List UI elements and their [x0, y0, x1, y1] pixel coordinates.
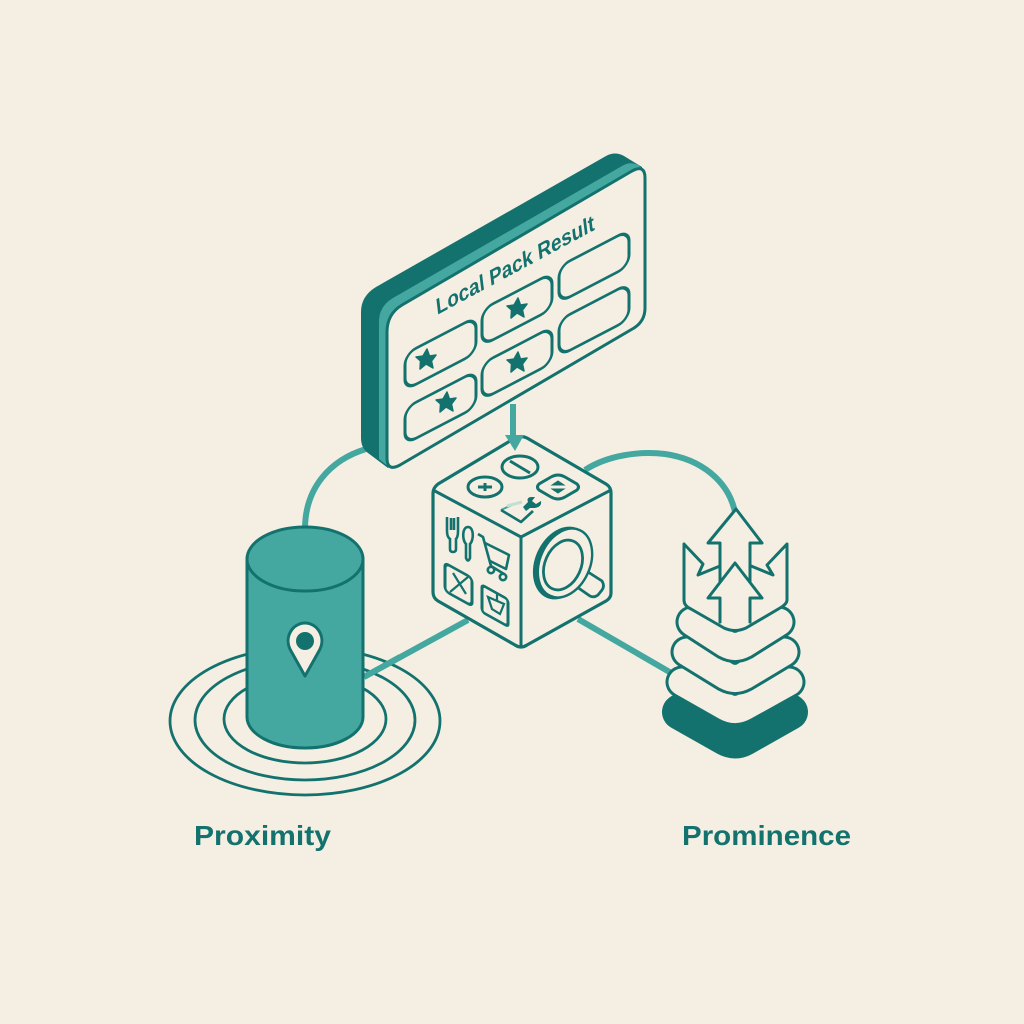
panel back edge	[361, 154, 642, 468]
panel mid edge	[379, 163, 645, 467]
icon: minus ellipse	[502, 456, 538, 478]
connector: cube to prominence stack	[578, 619, 673, 674]
icon: fork	[447, 517, 458, 552]
cube: local ranking factors	[433, 436, 611, 648]
icon: crossed box	[445, 563, 472, 606]
icon: diamond	[538, 475, 578, 499]
cube body	[433, 436, 611, 647]
icon: shopping cart	[478, 534, 509, 580]
dark base chevron	[680, 712, 790, 740]
connector over rings	[364, 657, 400, 677]
icon: wrench	[501, 497, 541, 522]
icon: map pin	[288, 623, 322, 676]
connector: cube to cylinder	[364, 620, 468, 677]
result cards	[405, 230, 629, 444]
panel front face	[387, 169, 645, 467]
arrow group: rising prominence	[684, 509, 787, 630]
main arrow fill	[708, 509, 762, 622]
prominence stack	[680, 509, 790, 740]
connector: cube to prominence arc	[585, 453, 735, 512]
chevron layer 1	[692, 622, 779, 646]
side arrows	[684, 544, 787, 630]
chevron layer 2	[687, 652, 784, 678]
front arrow fill	[708, 563, 762, 622]
label: prominence: Prominence	[682, 820, 851, 851]
label: proximity: Proximity	[194, 820, 331, 851]
panel: local pack result	[361, 154, 645, 468]
icon: magnifier	[522, 517, 604, 609]
cube edges	[433, 490, 611, 648]
magnifier handle	[577, 572, 604, 597]
rating stars	[416, 298, 527, 412]
connector: panel to cylinder	[305, 449, 366, 529]
front arrow outline	[708, 563, 762, 622]
main arrow outline	[708, 509, 762, 622]
chevron layer 3	[682, 682, 789, 710]
proximity rings	[170, 647, 440, 795]
arrow: panel to cube	[505, 404, 524, 451]
icon: spoon	[463, 527, 473, 560]
icon: plus ellipse	[468, 477, 502, 497]
panel heading: Local Pack Result	[435, 211, 596, 321]
icon: basket box	[482, 585, 508, 626]
cylinder with map pin	[247, 527, 363, 748]
